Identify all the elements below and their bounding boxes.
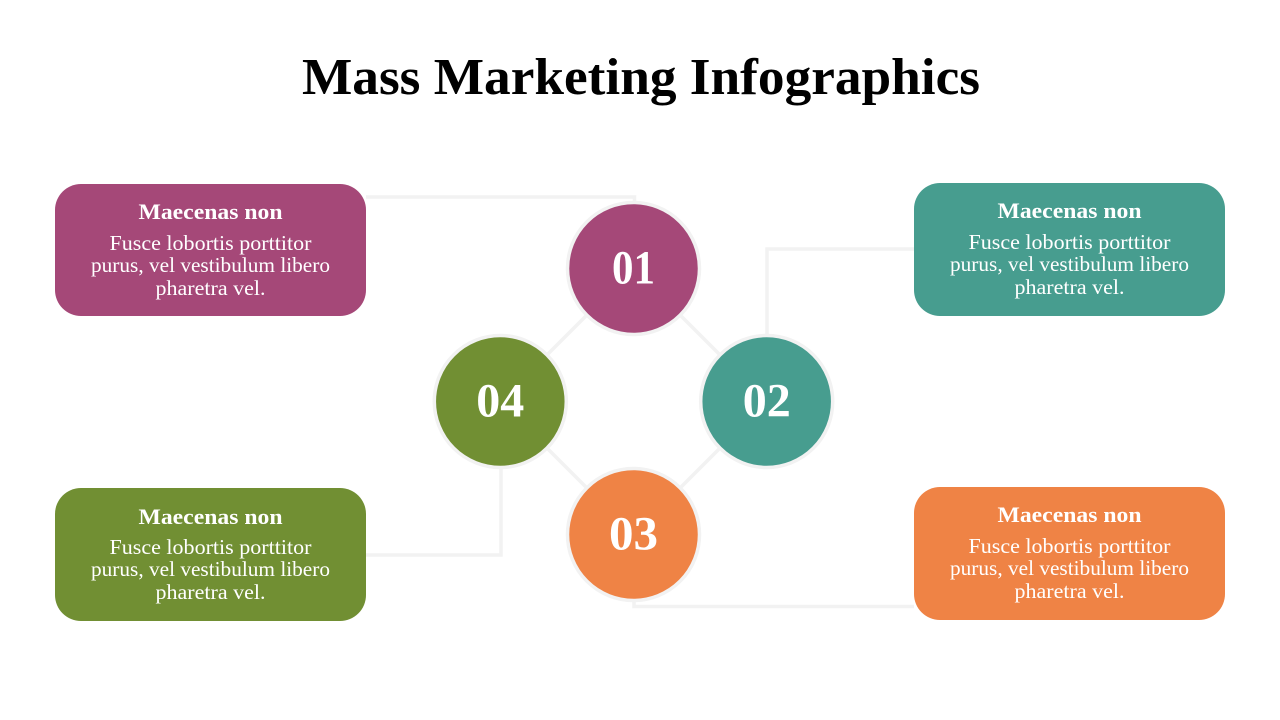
card 03 body text: pharetra vel. xyxy=(1014,579,1124,603)
card 02 heading: Maecenas non xyxy=(998,198,1142,223)
card 03 body text xyxy=(950,534,1189,603)
card 02 body text: purus, vel vestibulum libero xyxy=(950,252,1189,276)
circle 02 xyxy=(701,336,833,468)
card 03 body text: purus, vel vestibulum libero xyxy=(950,556,1189,580)
title: Mass Marketing Infographics xyxy=(302,49,980,106)
card 04 heading: Maecenas non xyxy=(138,504,282,529)
circle 01 xyxy=(568,202,700,334)
card 02 body text: pharetra vel. xyxy=(1014,275,1124,299)
card 01 body text: pharetra vel. xyxy=(156,276,266,300)
circle 01: 01 xyxy=(612,242,655,294)
panel: 01 magenta card xyxy=(55,184,366,316)
circle 03: 03 xyxy=(609,508,658,560)
card 04 body text: purus, vel vestibulum libero xyxy=(91,557,330,581)
panel: 02 teal card xyxy=(914,183,1225,316)
card 01 body text: Fusce lobortis porttitor xyxy=(110,231,312,255)
circle 02: 02 xyxy=(743,374,791,428)
circle 03 xyxy=(568,468,700,600)
circle 04 xyxy=(434,336,566,468)
panel: 04 green card xyxy=(55,488,366,621)
card 04 body text: pharetra vel. xyxy=(156,580,266,604)
card 03 heading: Maecenas non xyxy=(998,502,1142,527)
connector lines xyxy=(366,197,914,606)
card 02 body text xyxy=(950,230,1189,299)
card 02 body text: Fusce lobortis porttitor xyxy=(968,230,1170,254)
card 01 body text: purus, vel vestibulum libero xyxy=(91,253,330,277)
circle 04: 04 xyxy=(476,374,524,428)
card 03 body text: Fusce lobortis porttitor xyxy=(968,534,1170,558)
card 01 heading: Maecenas non xyxy=(138,199,282,224)
card 04 body text: Fusce lobortis porttitor xyxy=(110,535,312,559)
card 01 body text xyxy=(91,231,330,300)
panel: 03 orange card xyxy=(914,487,1225,620)
card 04 body text xyxy=(91,535,330,604)
